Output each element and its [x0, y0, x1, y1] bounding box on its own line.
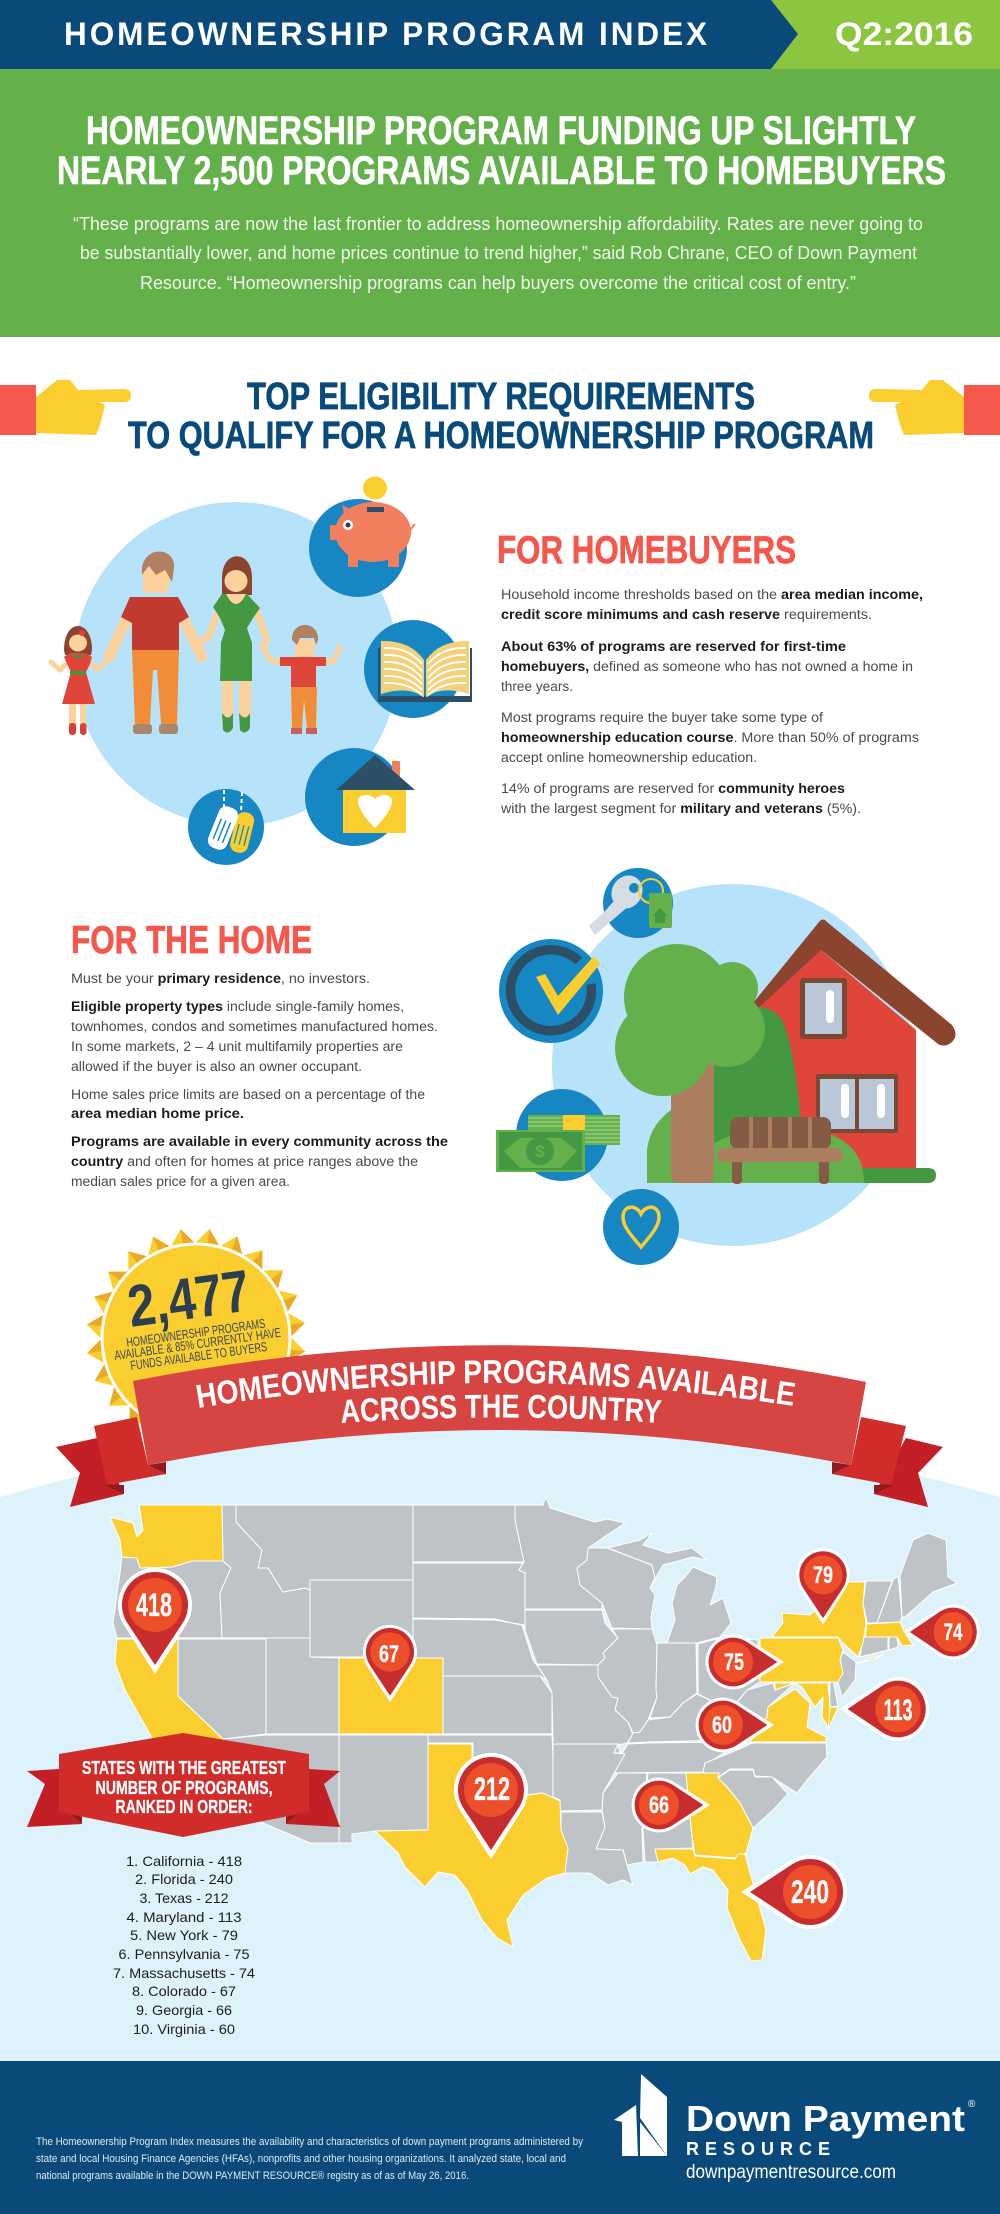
illustration: family	[51, 552, 340, 735]
text block: home requirements: Must be your primary residence , no investors.	[71, 971, 370, 986]
ribbon: states ranked: STATES WITH THE GREATEST	[82, 1758, 286, 1778]
logo: Down Payment Resource: ®	[968, 2099, 976, 2110]
map pin: Maryland 113: 113	[884, 1694, 912, 1727]
badge: 2,477 programs: 2,477	[124, 1258, 254, 1340]
text block: home requirements: area median home price.	[71, 1106, 244, 1121]
heading: eligibility requirements: TOP ELIGIBILITY REQUIREMENTS	[247, 376, 755, 418]
heading: for the home: FOR THE HOME	[71, 919, 312, 962]
banner: programs available across the country: HOMEOWNERSHIP PROGRAMS AVAILABLE	[196, 1360, 796, 1408]
list: top ten states: 10. Virginia - 60	[133, 2021, 235, 2037]
map: United States	[110, 1497, 957, 1961]
illustration: home circle	[552, 884, 914, 1246]
icon: money	[496, 1089, 620, 1181]
text block: homebuyers requirements: credit score minimums and cash reserve requirements.	[501, 607, 872, 622]
icon: check mark	[499, 939, 603, 1043]
list: top ten states	[113, 1853, 255, 2037]
map pin: Pennsylvania 75: 75	[724, 1649, 744, 1676]
map pin: Massachusetts 74: 74	[944, 1619, 963, 1646]
icon: heart	[603, 1189, 679, 1265]
text block: home requirements: Home sales price limits are based on a percentage of the	[71, 1087, 425, 1102]
list: top ten states: 9. Georgia - 66	[136, 2002, 232, 2018]
header band	[0, 0, 1000, 69]
map pin: Florida 240: 240	[791, 1874, 829, 1910]
person: father	[109, 552, 202, 734]
map pin: Virginia 60: 60	[712, 1712, 732, 1739]
map pin: Florida 240	[741, 1855, 847, 1929]
illustration: family circle	[74, 502, 398, 826]
icon: keys	[589, 868, 673, 938]
list: top ten states: 2. Florida - 240	[135, 1871, 233, 1887]
text block: home requirements: median sales price for a given area.	[71, 1174, 290, 1189]
text block: home requirements: Eligible property types include single-family homes,	[71, 999, 404, 1014]
text block: homebuyers requirements: About 63% of programs are reserved for first-time	[501, 639, 847, 654]
map pin: Massachusetts 74	[903, 1605, 980, 1659]
person: girl	[51, 626, 105, 735]
illustration: tree	[615, 944, 864, 1183]
text block: methodology: state and local Housing Finance Agencies (HFAs), nonprofits and other housing organizations. It analyzed state, local and	[36, 2153, 566, 2165]
map pin: Colorado 67: 67	[379, 1641, 399, 1668]
map pin: Georgia 66: 66	[649, 1792, 669, 1819]
heading: eligibility requirements	[128, 376, 874, 457]
list: top ten states: 5. New York - 79	[130, 1927, 238, 1943]
illustration: red house	[714, 920, 956, 1183]
text block: home requirements	[71, 971, 449, 1189]
icon: house with heart	[305, 748, 415, 846]
panel: green headline	[0, 69, 1000, 337]
map pin: Maryland 113	[840, 1677, 929, 1741]
map pin: New York 79	[796, 1548, 850, 1625]
text block: homebuyers requirements	[500, 587, 923, 816]
ribbon: states ranked: RANKED IN ORDER:	[116, 1797, 252, 1817]
map pin: Pennsylvania 75	[706, 1635, 784, 1689]
panel: green headline: Resource. “Homeownership programs can help buyers overcome the critical cost of entry.”	[140, 273, 856, 293]
text block: home requirements: allowed if the buyer is also an owner occupant.	[71, 1059, 362, 1074]
icon: dog tags	[188, 789, 264, 865]
text block: homebuyers requirements: three years.	[501, 679, 573, 694]
icon: piggy bank	[309, 476, 415, 597]
badge: 2,477 programs	[72, 1214, 320, 1462]
map pin: Colorado 67	[363, 1625, 417, 1702]
map pin: California 418	[118, 1568, 192, 1674]
list: top ten states: 4. Maryland - 113	[126, 1909, 242, 1925]
text block: homebuyers requirements: homeownership education course . More than 50% of programs	[501, 730, 919, 745]
text block: methodology	[36, 2136, 583, 2182]
logo: Down Payment Resource: RESOURCE	[686, 2139, 830, 2159]
logo: Down Payment Resource: Down Payment	[686, 2098, 965, 2139]
badge: 2,477 programs: HOMEOWNERSHIP PROGRAMS	[125, 1316, 266, 1350]
background: map dome	[0, 1425, 1000, 2061]
person: boy	[263, 625, 340, 734]
ribbon: states ranked	[27, 1733, 340, 1837]
text block: homebuyers requirements: with the largest segment for military and veterans (5%).	[500, 801, 861, 816]
map pin: Texas 212	[454, 1753, 528, 1859]
map: highlighted states	[110, 1505, 913, 1961]
banner: programs available across the country: ACROSS THE COUNTRY	[342, 1394, 662, 1423]
map pin: Virginia 60	[696, 1698, 774, 1752]
illustration: bench	[717, 1117, 843, 1184]
text block: homebuyers requirements: accept online homeownership education.	[501, 750, 757, 765]
icon: right pointing hand	[869, 380, 1000, 435]
panel: green headline: “These programs are now the last frontier to address homeownership affordability. Rates are never going to	[73, 214, 923, 234]
ribbon: states ranked: NUMBER OF PROGRAMS,	[96, 1778, 272, 1798]
badge: 2,477 programs: FUNDS AVAILABLE TO BUYERS	[129, 1339, 268, 1373]
icon: money: $	[535, 1142, 545, 1161]
map: grey states	[113, 1497, 957, 1885]
text block: homebuyers requirements: 14% of programs are reserved for community heroes	[501, 781, 845, 796]
text block: homebuyers requirements: Household income thresholds based on the area median income,	[501, 587, 923, 602]
panel: green headline: be substantially lower, and home prices continue to trend higher,” said Rob Chrane, CEO of Down Payment	[80, 243, 917, 263]
heading: for homebuyers: FOR HOMEBUYERS	[497, 529, 796, 572]
header band: HOMEOWNERSHIP PROGRAM INDEX	[64, 16, 710, 52]
text block: homebuyers requirements: Most programs require the buyer take some type of	[501, 710, 823, 725]
badge: 2,477 programs: AVAILABLE & 85% CURRENTLY HAVE	[113, 1325, 282, 1363]
text block: homebuyers requirements: homebuyers, defined as someone who has not owned a home in	[501, 659, 913, 674]
header band: Q2:2016	[835, 16, 973, 52]
footer band	[0, 2061, 1000, 2214]
text block: home requirements: country and often for homes at price ranges above the	[71, 1154, 418, 1169]
list: top ten states: 8. Colorado - 67	[132, 1983, 236, 1999]
text block: methodology: The Homeownership Program Index measures the availability and characteristics of down payment programs administered by	[36, 2136, 583, 2148]
list: top ten states: 3. Texas - 212	[140, 1890, 229, 1906]
list: top ten states: 1. California - 418	[126, 1853, 242, 1869]
text block: home requirements: townhomes, condos and sometimes manufactured homes.	[71, 1019, 438, 1034]
list: top ten states: 7. Massachusetts - 74	[113, 1965, 255, 1981]
person: mother	[198, 556, 267, 733]
map pin: Texas 212: 212	[474, 1771, 510, 1807]
map pin: California 418: 418	[136, 1587, 172, 1623]
text block: home requirements: Programs are available in every community across the	[71, 1134, 449, 1149]
banner: programs available across the country	[56, 1345, 943, 1507]
logo: Down Payment Resource: downpaymentresource.com	[686, 2162, 896, 2183]
logo: Down Payment Resource	[614, 2074, 976, 2183]
icon: left pointing hand	[0, 380, 131, 435]
text block: home requirements: In some markets, 2 – 4 unit multifamily properties are	[71, 1039, 403, 1054]
icon: open book	[364, 620, 472, 718]
map pin: Georgia 66	[632, 1778, 710, 1832]
list: top ten states: 6. Pennsylvania - 75	[118, 1946, 250, 1962]
text block: methodology: national programs available in the DOWN PAYMENT RESOURCE® registry as of as of May 26, 2016.	[36, 2170, 469, 2182]
map pin: New York 79: 79	[813, 1562, 833, 1589]
